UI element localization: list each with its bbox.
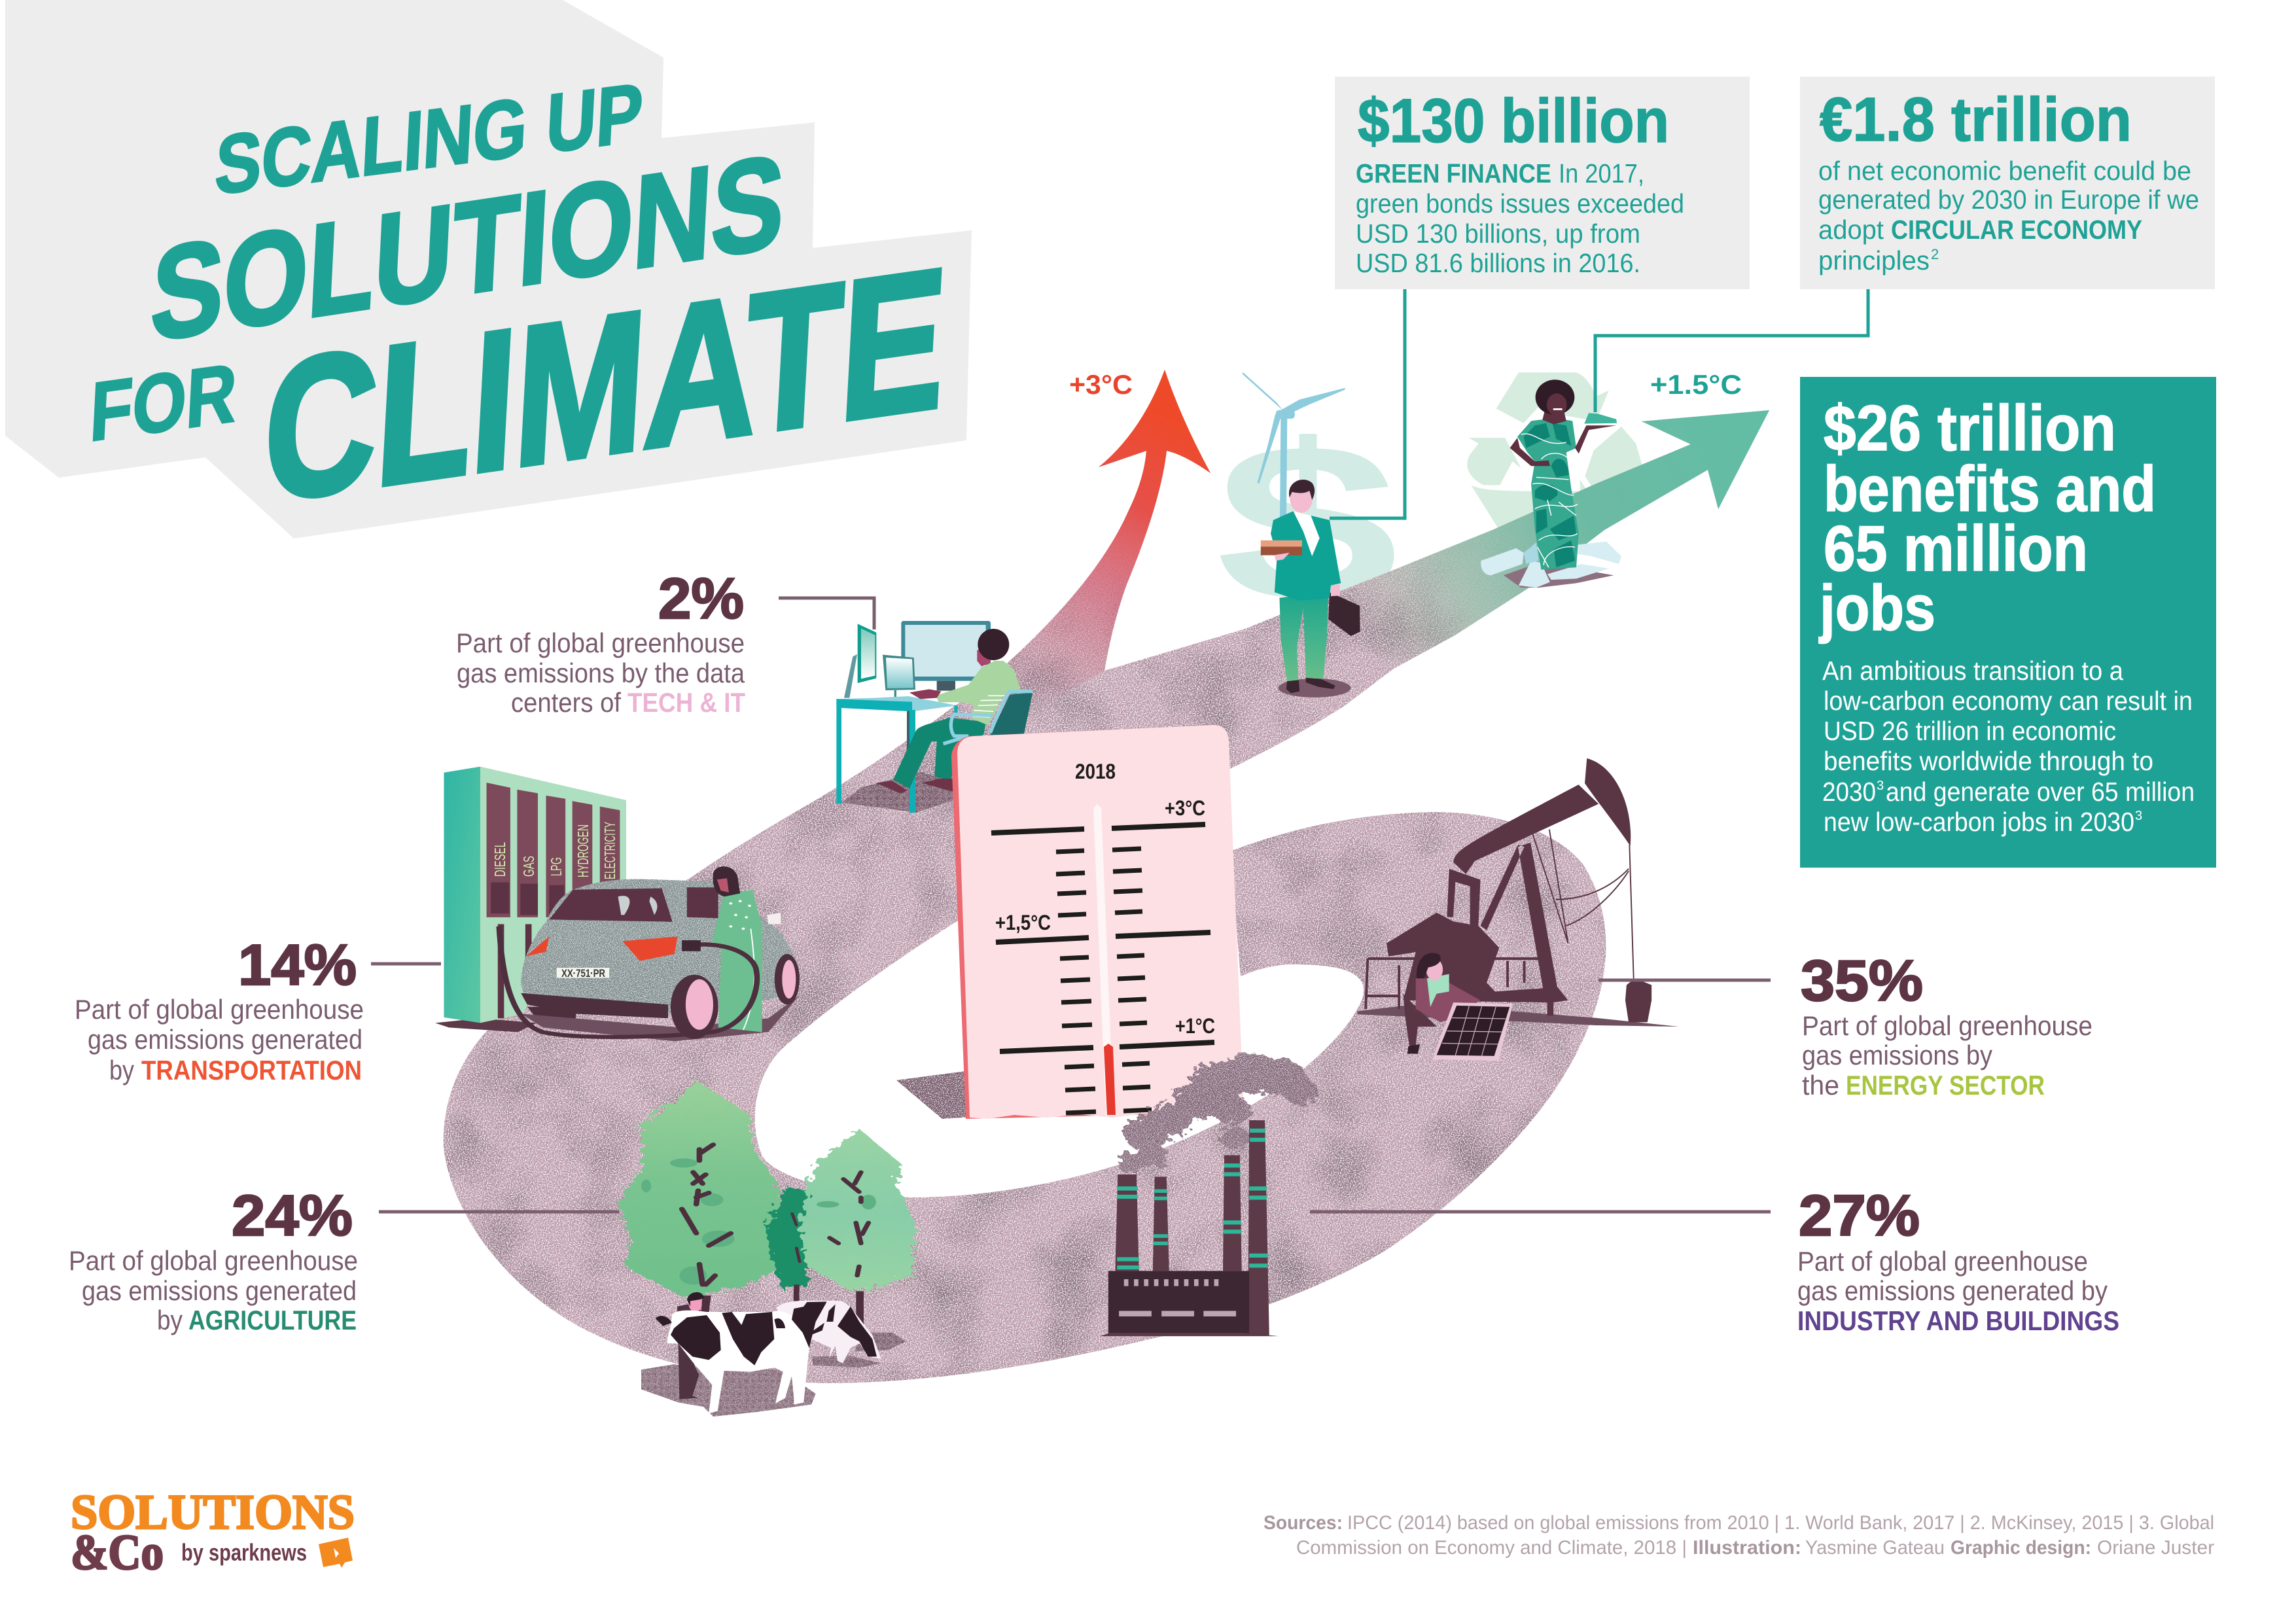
sources and credits: Graphic design: bbox=[1951, 1537, 2091, 1559]
stat leader: tech and IT bbox=[779, 598, 874, 629]
logo: Solutions and Co by Sparknews: SOLUTIONS bbox=[71, 1485, 355, 1540]
title banner bbox=[5, 0, 972, 545]
chimneys bbox=[1115, 1120, 1269, 1335]
stat: agriculture: AGRICULTURE bbox=[188, 1305, 357, 1335]
stat: tech and IT: centers of bbox=[511, 687, 621, 718]
stat: energy sector: Part of global greenhouse bbox=[1802, 1010, 2093, 1041]
stat: tech and IT: Part of global greenhouse bbox=[456, 627, 745, 658]
illustration: car and woman refuelling bbox=[499, 866, 800, 1041]
callout leader: circular economy bbox=[1595, 289, 1868, 412]
panel: circular economy: CIRCULAR ECONOMY bbox=[1891, 215, 2142, 245]
fuel labels: HYDROGEN bbox=[574, 824, 592, 877]
front cow bbox=[667, 1311, 809, 1413]
thermometer tube bbox=[1093, 804, 1114, 1115]
panel: green finance: $130 billion bbox=[1358, 86, 1669, 156]
large monitor bbox=[901, 621, 991, 681]
thermometer card bbox=[957, 725, 1244, 1119]
panel: green finance: green bonds issues exceeded bbox=[1356, 188, 1684, 219]
icon: wind turbine bbox=[1242, 372, 1345, 530]
thermometer card edge bbox=[951, 725, 1244, 1119]
desk bbox=[836, 696, 957, 711]
panel: circular economy bbox=[1800, 77, 2215, 289]
logo: Solutions and Co by Sparknews: by sparknews bbox=[181, 1539, 307, 1566]
panel: circular economy: of net economic benefit could be bbox=[1818, 156, 2191, 186]
stat: tech and IT bbox=[456, 566, 745, 718]
sources and credits: Illustration: bbox=[1693, 1537, 1801, 1559]
title background bbox=[5, 0, 972, 538]
fuel labels: LPG bbox=[548, 857, 565, 876]
tree leaves and branches bbox=[641, 1158, 876, 1284]
thermometer year: 2018 bbox=[1075, 760, 1116, 783]
scale ticks bbox=[991, 824, 1214, 1113]
back cow bbox=[777, 1301, 881, 1363]
stat: energy sector bbox=[1598, 948, 2093, 1101]
stat: transportation: gas emissions generated bbox=[88, 1024, 362, 1055]
icon: video speech bubble bbox=[319, 1538, 353, 1568]
icon: dollar sign backdrop: $ bbox=[1216, 398, 1399, 648]
solar panel bbox=[1432, 1002, 1513, 1061]
panel: low-carbon economy benefits: 3 bbox=[1877, 779, 1884, 793]
stat: energy sector: ENERGY SECTOR bbox=[1846, 1070, 2045, 1101]
license plate text: XX·751·PR bbox=[561, 967, 605, 980]
stat: energy sector: 35% bbox=[1801, 948, 1923, 1013]
panel: low-carbon economy benefits: new low-carbon jobs in 2030 bbox=[1824, 807, 2134, 837]
stat: tech and IT: gas emissions by the data bbox=[457, 658, 745, 688]
title line: solutions: SOLUTIONS bbox=[148, 127, 788, 370]
thermometer mercury bbox=[1104, 1044, 1116, 1115]
panel: low-carbon economy benefits: benefits worldwide through to bbox=[1824, 746, 2153, 776]
solar worker bbox=[1404, 994, 1437, 1046]
panel: low-carbon economy benefits: 2030 bbox=[1822, 777, 1876, 807]
small monitor bbox=[883, 655, 915, 690]
stat: industry and buildings: Part of global greenhouse bbox=[1797, 1246, 2088, 1277]
stat: industry and buildings: INDUSTRY AND BUILDINGS bbox=[1797, 1305, 2119, 1336]
stat: tech and IT: TECH & IT bbox=[627, 687, 745, 718]
temperature label: +3C: +3°C bbox=[1069, 369, 1133, 400]
stat: transportation: 14% bbox=[238, 932, 357, 997]
panel: circular economy: generated by 2030 in Europe if we bbox=[1818, 185, 2199, 215]
panel: circular economy: adopt bbox=[1818, 215, 1884, 245]
thermometer bbox=[896, 725, 1244, 1119]
fuel labels: DIESEL bbox=[491, 842, 508, 877]
panel: green finance: USD 81.6 billions in 2016. bbox=[1356, 248, 1640, 278]
fuel labels bbox=[491, 822, 618, 879]
panel: circular economy: €1.8 trillion bbox=[1820, 85, 2132, 154]
road: emissions spiral with two arrows bbox=[444, 370, 1769, 1383]
stat: agriculture: by bbox=[157, 1305, 183, 1335]
pump motor bbox=[1386, 913, 1568, 1015]
logo: Solutions and Co by Sparknews: &Co bbox=[71, 1525, 164, 1580]
illustration: oil pump with solar panel bbox=[1357, 758, 1679, 1061]
stat: industry and buildings: 27% bbox=[1799, 1183, 1920, 1248]
panel: circular economy: 2 bbox=[1931, 246, 1939, 262]
stat: agriculture: 24% bbox=[232, 1183, 353, 1248]
seated worker bbox=[893, 718, 986, 788]
temperature label: +1.5C: +1.5°C bbox=[1650, 369, 1742, 400]
stat: agriculture: gas emissions generated bbox=[82, 1275, 357, 1306]
panel: low-carbon economy benefits: An ambitious transition to a bbox=[1822, 656, 2123, 686]
panel: green finance bbox=[1335, 77, 1750, 289]
sources and credits: Oriane Juster bbox=[2097, 1537, 2214, 1559]
panel: green finance: GREEN FINANCE bbox=[1356, 158, 1551, 188]
stat: agriculture: Part of global greenhouse bbox=[69, 1245, 358, 1276]
stat: energy sector: gas emissions by bbox=[1802, 1040, 1992, 1070]
panel: green finance: USD 130 billions, up from bbox=[1356, 219, 1640, 249]
stat: transportation: Part of global greenhouse bbox=[75, 994, 364, 1025]
panel: circular economy: principles bbox=[1818, 245, 1930, 275]
title line: for: FOR bbox=[88, 346, 239, 459]
arrow: +3C red branch bbox=[949, 370, 1210, 752]
pump front bbox=[480, 767, 626, 1023]
chimney bands bbox=[1117, 1129, 1268, 1269]
stat: agriculture bbox=[69, 1183, 619, 1335]
logo: Solutions and Co by Sparknews bbox=[71, 1485, 355, 1580]
thermometer label: +3C: +3°C bbox=[1165, 796, 1205, 820]
illustration: trees bbox=[618, 1080, 915, 1299]
sources and credits: Yasmine Gateau bbox=[1805, 1537, 1945, 1559]
panel: low-carbon economy benefits: jobs bbox=[1818, 572, 1935, 644]
panel: low-carbon economy benefits: 3 bbox=[2135, 809, 2142, 823]
sources and credits: Sources: bbox=[1263, 1512, 1343, 1534]
panel: low-carbon economy benefits: low-carbon economy can result in bbox=[1824, 686, 2193, 716]
stat: transportation: by bbox=[109, 1055, 134, 1086]
panel: low-carbon economy benefits: $26 trillion bbox=[1824, 392, 2116, 464]
character: woman holding a recycled shoe bbox=[1481, 380, 1621, 588]
farmer bbox=[677, 1304, 707, 1399]
pump head bbox=[1585, 758, 1631, 846]
side monitor bbox=[858, 624, 876, 683]
illustration: data centre desk bbox=[836, 621, 1033, 813]
arrow: +1.5C green branch bbox=[1210, 410, 1769, 746]
plastic bottles bbox=[1481, 542, 1621, 588]
smoke plumes bbox=[1118, 1053, 1318, 1173]
panel: low-carbon economy benefits: and generate over 65 million bbox=[1886, 777, 2195, 807]
icon: recycling symbol backdrop bbox=[1467, 372, 1645, 536]
panel: low-carbon economy benefits bbox=[1800, 377, 2216, 868]
callout leader: green finance bbox=[1330, 289, 1405, 518]
fuel labels: GAS bbox=[520, 856, 537, 877]
road surface bbox=[444, 370, 1769, 1383]
panel: green finance: In 2017, bbox=[1559, 158, 1644, 188]
thermometer label: +1C: +1°C bbox=[1175, 1014, 1215, 1038]
sources and credits bbox=[1263, 1512, 2214, 1559]
thermometer shadow bbox=[896, 1071, 970, 1119]
stat: industry and buildings: gas emissions generated by bbox=[1797, 1275, 2108, 1306]
pump side bbox=[444, 767, 480, 1023]
thermometer label: +1,5C: +1,5°C bbox=[995, 911, 1051, 934]
fuel slots bbox=[487, 783, 620, 917]
illustration: factory with smoke bbox=[1100, 1053, 1318, 1336]
stat: industry and buildings bbox=[1310, 1183, 2119, 1336]
panel: low-carbon economy benefits: benefits and bbox=[1824, 453, 2156, 525]
panel: low-carbon economy benefits: USD 26 trillion in economic bbox=[1824, 716, 2116, 746]
sources and credits: IPCC (2014) based on global emissions from 2010 | 1. World Bank, 2017 | 2. McKinsey, 2015 | 3. Global bbox=[1347, 1512, 2214, 1534]
illustration: cows and farmer bbox=[641, 1284, 906, 1417]
character: businessman with cash bbox=[1261, 480, 1360, 697]
sources and credits: Commission on Economy and Climate, 2018 | bbox=[1296, 1537, 1687, 1559]
stat: tech and IT: 2% bbox=[658, 566, 744, 631]
fuel labels: ELECTRICITY bbox=[601, 822, 618, 879]
car body bbox=[521, 879, 798, 1014]
refuelling woman bbox=[712, 890, 762, 1032]
title line: climate: CLIMATE bbox=[258, 226, 951, 545]
title line: scaling up: SCALING UP bbox=[213, 66, 645, 213]
panel: low-carbon economy benefits: 65 million bbox=[1824, 512, 2088, 584]
illustration: fuel station bbox=[435, 767, 626, 1032]
factory building bbox=[1108, 1271, 1249, 1335]
stat: transportation: TRANSPORTATION bbox=[141, 1055, 362, 1086]
stat: energy sector: the bbox=[1802, 1070, 1839, 1101]
stat: transportation bbox=[75, 932, 441, 1086]
wellhead bbox=[1625, 978, 1651, 1022]
pump beam bbox=[1453, 785, 1598, 874]
